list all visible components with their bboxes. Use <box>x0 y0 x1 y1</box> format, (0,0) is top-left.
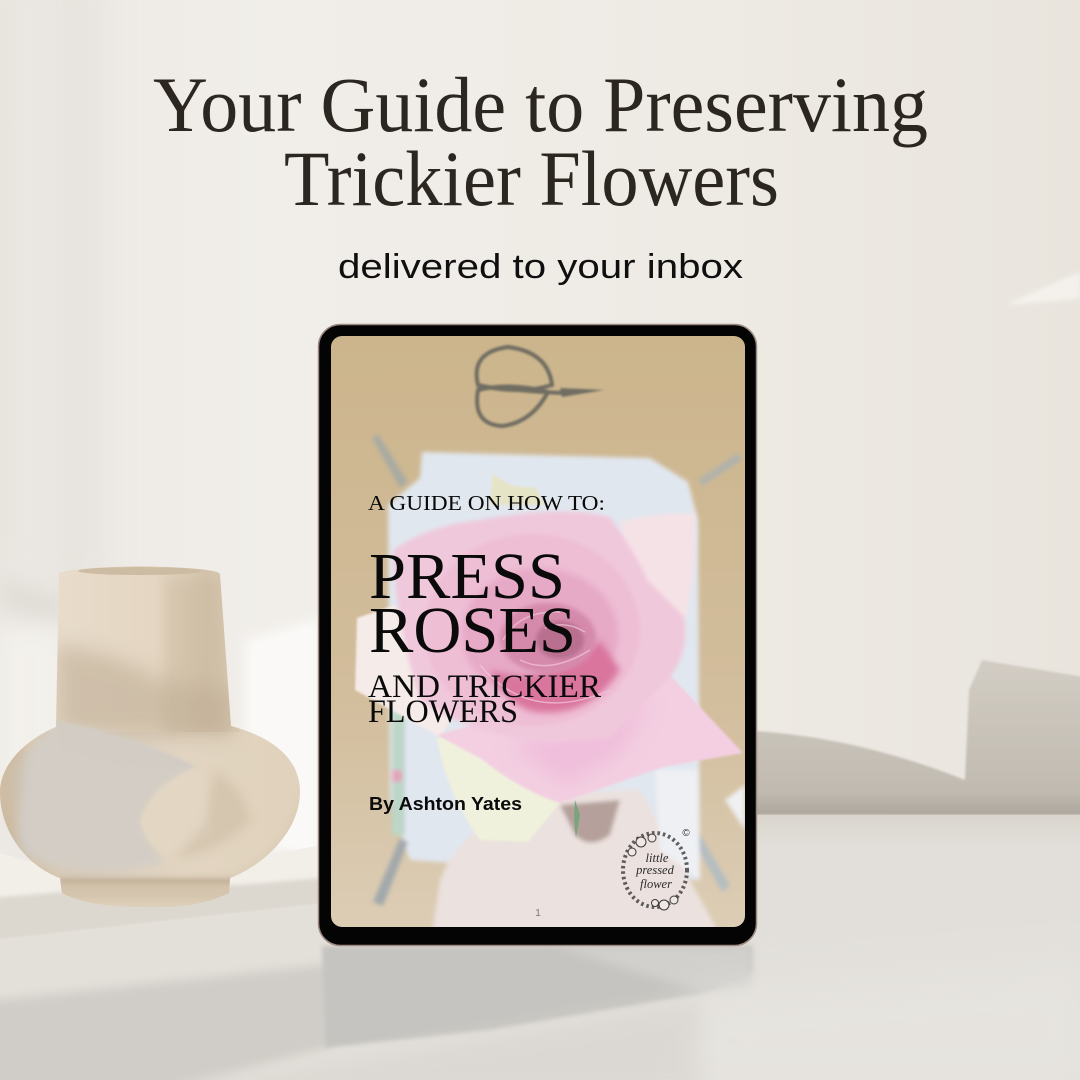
ring 2 <box>462 568 618 700</box>
left pale petal <box>354 606 450 736</box>
hand <box>432 790 720 935</box>
title <box>153 61 928 222</box>
rose <box>355 473 743 842</box>
cover subheadline: AND TRICKIER <box>368 669 601 705</box>
icon: scissors <box>477 347 604 426</box>
subtitle: delivered to your inbox <box>338 248 743 286</box>
title: Trickier Flowers <box>284 135 779 222</box>
cover headline <box>369 540 576 667</box>
tablet cast shadow <box>0 964 330 1080</box>
cover headline: PRESS <box>369 540 565 613</box>
wall shadows <box>755 660 1080 815</box>
cover headline: ROSES <box>369 594 576 667</box>
page number: 1 <box>535 908 541 919</box>
logo: little pressed flower: flower <box>640 877 672 891</box>
tablet <box>318 324 756 946</box>
logo: little pressed flower: little <box>646 851 669 865</box>
yellow-white lower petal <box>437 737 560 842</box>
cover subheadline: FLOWERS <box>368 694 518 730</box>
logo: little pressed flower: © <box>682 828 690 839</box>
right and centre table surface <box>322 815 1080 1080</box>
body edge shading <box>17 844 230 900</box>
stem <box>574 800 580 838</box>
title: Your Guide to Preserving <box>153 61 928 148</box>
ring 1 <box>424 534 640 726</box>
left table surface <box>0 845 322 980</box>
deep crescent <box>490 640 620 713</box>
lower pink petal <box>437 675 743 803</box>
tablet frame <box>318 324 756 946</box>
vase <box>0 560 305 915</box>
core <box>500 603 596 673</box>
light crescent on body <box>145 812 146 814</box>
cover text <box>368 491 605 730</box>
tablet screen <box>331 336 745 935</box>
cover eyebrow: A GUIDE ON HOW TO: <box>368 491 605 515</box>
top sepal <box>490 473 545 505</box>
clips <box>372 434 408 488</box>
vase cast shadow <box>0 878 322 942</box>
logo: little pressed flower <box>623 828 690 910</box>
author: By Ashton Yates <box>369 794 522 814</box>
neck shadow <box>55 645 232 735</box>
paper <box>388 452 700 880</box>
grey shadow on body <box>16 728 188 865</box>
right pale petal <box>620 514 695 620</box>
logo: little pressed flower: pressed <box>635 863 675 877</box>
cover subheadline <box>368 669 601 730</box>
outer petals <box>393 512 685 743</box>
